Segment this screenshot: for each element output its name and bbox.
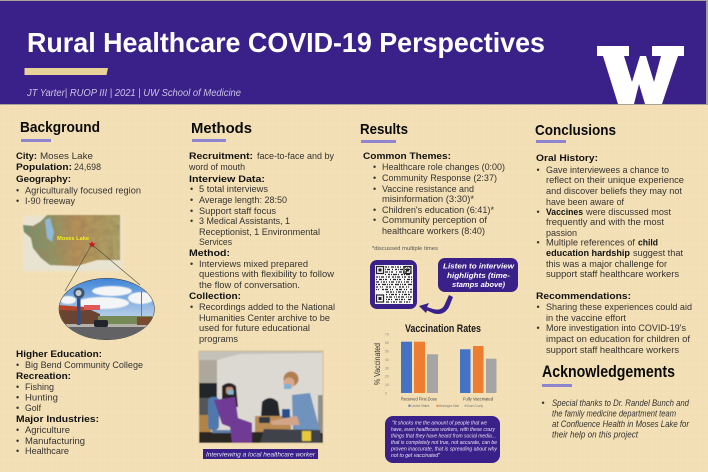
text block: common themes: • [373,215,376,225]
text block: methods details: Collection: [189,291,241,302]
callout: interview quote: "It shocks me the amount of people that we [392,420,487,426]
x axis labels: Received First Dose [401,396,437,402]
panel: results [360,121,518,463]
y axis ticks: 70 [385,333,389,337]
text block: methods details: Humanities Center archive to be [199,313,330,324]
text block: education, recreation, industries: Recreation: [16,371,71,382]
text block: common themes: Healthcare role changes (0:00) [382,162,505,173]
y axis ticks: 0 [385,392,387,396]
x axis labels: Fully Vaccinated [463,396,493,402]
text block: methods details: 5 total interviews [199,184,268,195]
text block: recommendations: More investigation into COVID-19's [546,323,686,334]
text block: recommendations: • [536,323,540,333]
text block: oral history: Vaccines [546,207,583,218]
text block: common themes: misinformation (3:30)* [382,194,474,205]
text block: methods details: Interview Data: [189,174,265,185]
text block: methods details: • [190,206,193,216]
bars: fully vaccinated [460,346,496,393]
text block: education, recreation, industries: • [16,360,19,370]
photo caption [203,449,318,459]
text block: common themes: healthcare workers (8:40) [382,226,485,237]
bars: received first dose [401,342,438,393]
text block: education, recreation, industries: Higher Education: [16,349,102,360]
y axis label: % Vaccinated [372,343,382,385]
bar chart: vaccination rates [372,323,496,408]
text block: city facts [16,151,141,207]
text block: methods details: • [190,259,193,269]
panel: background [16,119,156,457]
text block: oral history: child [638,238,658,248]
callout: listen to interview highlights: highlights (time- [447,271,511,280]
legend: United States [412,404,430,408]
text block: oral history: • [536,238,540,248]
text block: common themes: • [373,205,376,215]
text block: city facts: • [16,196,19,206]
text block: recommendations: in the vaccine effort [546,313,626,324]
text block: city facts: Agriculturally focused region [25,186,141,196]
panel: methods [188,120,335,459]
heading: results: Results [360,121,408,138]
panel: acknowledgements [542,363,690,440]
heading: background: Background [20,119,100,136]
y axis ticks: 30 [385,366,389,370]
y axis ticks: 20 [385,375,389,379]
legend: Washington State [439,404,459,408]
text block: oral history: reflect on their unique experience [546,175,684,186]
text block: oral history [536,153,684,280]
callout: interview quote: have, even healthcare workers, with these crazy [391,427,495,433]
text block: city facts: Population: [16,162,72,173]
text block: methods details: Method: [189,248,230,259]
text block: city facts: 24,698 [74,162,101,173]
text block: education, recreation, industries: Healthcare [25,446,69,457]
text block: education, recreation, industries [16,349,143,457]
text block: city facts: City: [16,151,37,162]
text block: methods details: • [190,195,193,205]
subtitle: JT Yarter| RUOP III | 2021 | UW School of Medicine [26,88,241,99]
text block: thanks: their help on this project [552,430,638,440]
callout: listen to interview highlights: Listen to interview [443,262,515,270]
text block: methods details: questions with flexibility to follow [199,269,334,280]
photo: Moses Lake street in oval [58,278,156,340]
text block: education, recreation, industries: Manufacturing [25,436,85,447]
text block: common themes: Children's education (6:41)* [382,205,494,216]
callout: interview quote [385,416,500,463]
text block: methods details: word of mouth [188,162,245,173]
text block: methods details: Receptionist, 1 Environmental [199,227,320,238]
text block: thanks: • [542,398,545,408]
arrow: callout to QR code [419,295,453,314]
heading: acknowledgements [542,363,675,387]
text block: methods details: Average length: 28:50 [199,195,287,206]
text block: oral history: have been aware of [546,197,624,208]
text block: city facts: Moses Lake [40,151,93,162]
text block: methods details: • [190,216,193,226]
text block: methods details: • [190,184,193,194]
text block: education, recreation, industries: Fishing [25,382,54,393]
text block: oral history: and discover beliefs they may not [546,186,682,197]
text block: methods details [188,151,335,345]
text block: education, recreation, industries: Golf [25,403,41,414]
text block: oral history: passion [546,228,577,239]
icon: star marker [88,241,96,248]
callout: interview quote: not to get vaccinated" [391,453,441,459]
callout: interview quote: that is completely not true, not accurate, can be [391,440,497,446]
legend: Grant County [467,404,483,408]
text block: methods details: used for future educational [199,323,310,334]
map label: Moses Lake: Moses Lake [57,236,89,242]
heading: methods: Methods [191,120,252,137]
footnote: *discussed multiple times [372,246,438,252]
text block: education, recreation, industries: • [16,403,19,413]
text block: recommendations: • [536,302,540,312]
text block: common themes: Vaccine resistance and [382,184,474,195]
text block: methods details: programs [199,334,238,345]
legend [408,404,483,408]
photo: interviewing a healthcare worker [199,351,323,443]
icon: QR code [370,260,417,309]
text block: education, recreation, industries: • [16,425,19,435]
text block: oral history: support staff healthcare workers [546,269,679,280]
text block: oral history: • [536,207,540,217]
text block: thanks: the family medicine department team [552,408,676,420]
text block: methods details: Services [199,237,232,248]
text block: education, recreation, industries: • [16,382,19,392]
text block: education, recreation, industries: Big Bend Community College [25,360,143,371]
y axis ticks: 60 [385,341,389,345]
text block: methods details: Support staff focus [199,206,276,217]
callout: interview quote: things that they have heard from social media... [391,434,496,440]
text block: methods details: 3 Medical Assistants, 1 [199,216,290,227]
text block: oral history: Oral History: [536,153,598,164]
text block: education, recreation, industries: Agriculture [25,425,70,436]
header banner [0,0,708,105]
text block: common themes: Community perception of [382,215,487,226]
text block: city facts: I-90 freeway [25,196,75,207]
photo caption: Interviewing a local healthcare worker [206,452,316,458]
text block: education, recreation, industries: Hunting [25,392,58,404]
text block: common themes: • [373,173,376,183]
text block: common themes: • [373,162,376,172]
text block: education, recreation, industries: • [16,392,19,402]
text block: oral history: were discussed most [585,207,671,218]
text block: methods details: Interviews mixed prepared [199,259,308,270]
chart title: Vaccination Rates [405,323,481,335]
text block: common themes: Common Themes: [363,151,451,162]
x axis labels [401,396,493,402]
text block: methods details: Recordings added to the National [199,302,335,313]
text block: oral history: education hardship [546,248,630,259]
heading: conclusions: Conclusions [535,122,616,139]
text block: recommendations: Sharing these experiences could aid [546,302,692,313]
text block: methods details: face-to-face and by [257,151,334,162]
map of Washington [23,215,140,291]
text block: common themes: • [373,184,376,194]
text block: oral history: • [536,165,540,175]
text block: oral history: Gave interviewees a chance to [546,165,669,176]
text block: oral history: frequently and with the most [546,217,664,228]
text block: city facts: Geography: [16,174,71,185]
text block: common themes: Community Response (2:37) [382,173,497,184]
panel: conclusions [535,122,692,356]
text block: education, recreation, industries: • [16,446,19,456]
gold accent bar [24,68,108,75]
callout: interview quote: proven inaccurate, that is spreading about why [390,446,497,452]
text block: thanks [542,398,690,440]
y axis ticks: 40 [385,358,389,362]
text block: city facts: • [16,186,19,196]
text block: recommendations: impact on education for children of [546,334,690,345]
text block: recommendations: support staff healthcare workers [546,345,679,356]
callout: listen to interview highlights [438,258,518,292]
title: Rural Healthcare COVID-19 Perspectives [27,27,545,58]
text block: oral history: this was a major challenge for [546,259,668,270]
text block: oral history: suggest that [633,248,683,259]
y axis ticks: 10 [385,383,389,387]
text block: methods details: • [190,302,193,312]
text block: recommendations [536,291,692,356]
text block: recommendations: Recommendations: [536,291,631,302]
callout: listen to interview highlights: stamps above) [452,280,505,289]
text block: common themes [363,151,505,237]
y axis ticks: 50 [385,350,389,354]
heading: background [20,119,100,142]
text block: education, recreation, industries: Major Industries: [16,414,99,425]
text block: oral history: Multiple references of [546,238,635,248]
text block: methods details: the flow of conversation. [199,280,300,291]
icon: UW W logo [597,46,684,104]
heading: acknowledgements: Acknowledgements [542,363,675,381]
text block: education, recreation, industries: • [16,436,19,446]
text block: methods details: Recruitment: [189,151,253,162]
y axis ticks [385,333,389,396]
